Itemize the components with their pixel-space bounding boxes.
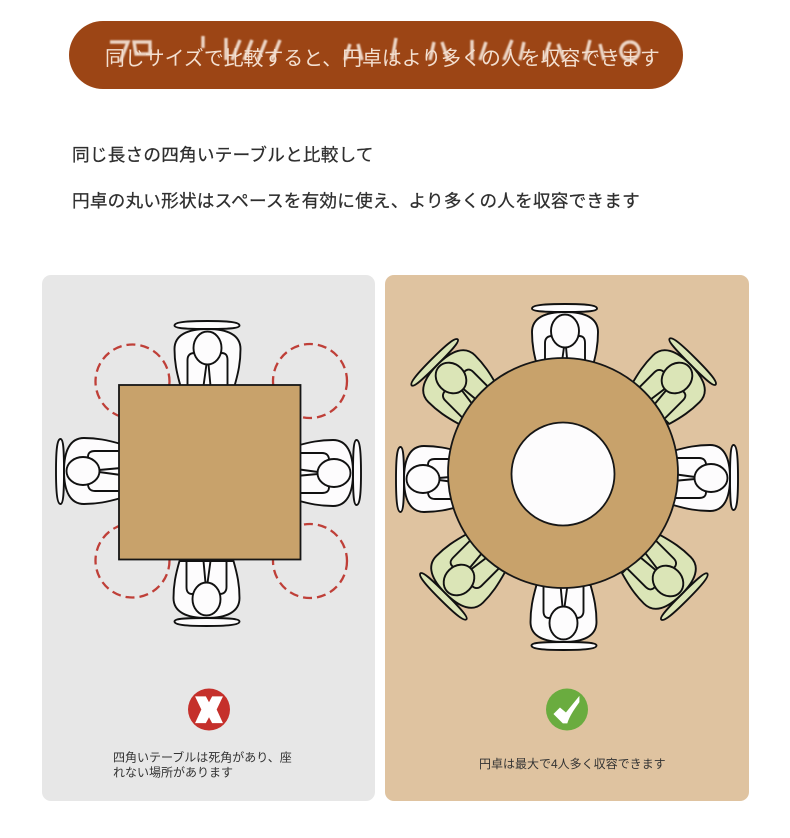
seats around square table xyxy=(56,321,361,626)
icon: check xyxy=(546,688,588,730)
round table xyxy=(448,358,678,588)
square table xyxy=(119,385,300,560)
header banner xyxy=(69,21,683,89)
caption: square table: れない場所があります xyxy=(113,764,233,780)
green added seats xyxy=(409,336,719,623)
intro text: 円卓の丸い形状はスペースを有効に使え、より多くの人を収容できます xyxy=(72,191,640,211)
dead corner circles xyxy=(96,344,347,598)
icon: cross xyxy=(188,688,230,730)
intro text xyxy=(72,145,640,211)
banner title: 同じサイズで比較すると、円卓はより多くの人を収容できます xyxy=(105,48,660,70)
intro text: 同じ長さの四角いテーブルと比較して xyxy=(72,145,374,165)
panel: round table xyxy=(385,275,749,801)
caption: round table: 円卓は最大で4人多く収容できます xyxy=(479,757,666,771)
caption: square table: 四角いテーブルは死角があり、座 xyxy=(113,750,292,764)
panel: square table xyxy=(42,275,375,801)
table centre xyxy=(512,422,614,526)
caption: square table xyxy=(113,750,292,780)
white seats around round table xyxy=(396,304,738,650)
